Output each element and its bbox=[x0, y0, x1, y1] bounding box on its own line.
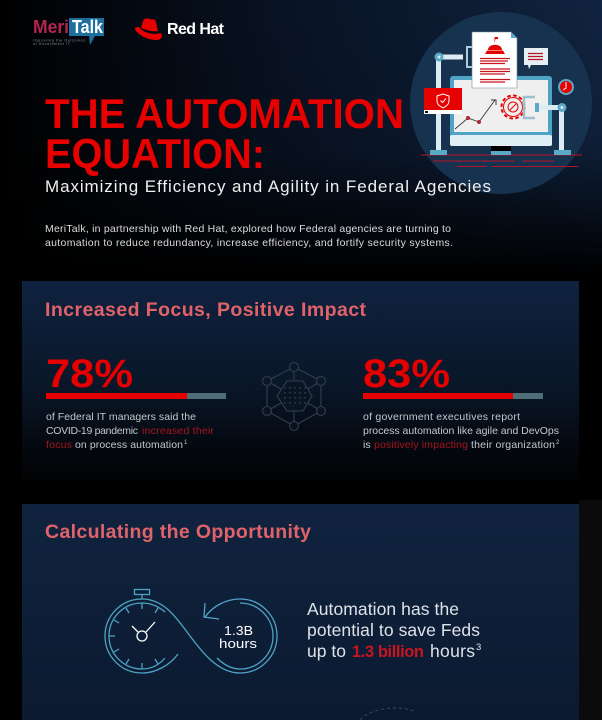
label: 1.3B hours bbox=[219, 623, 258, 651]
intro text: automation to reduce redundancy, increase efficiency, and fortify security systems. bbox=[45, 237, 453, 249]
stat: 83%: of government executives report bbox=[363, 411, 520, 423]
logo: Red Hat bbox=[135, 18, 225, 40]
stat: 83%: is bbox=[363, 439, 371, 451]
callout: 1.3 billion hours bbox=[307, 599, 481, 661]
logo: MeriTalk: Talk bbox=[72, 17, 104, 37]
subtitle: Maximizing Efficiency and Agility in Federal Agencies bbox=[45, 177, 491, 196]
stat: 83%: process automation like agile and DevOps bbox=[363, 425, 559, 437]
icon: network hexagon bbox=[262, 362, 326, 430]
intro text: MeriTalk, in partnership with Red Hat, explored how Federal agencies are turning to bbox=[45, 223, 451, 235]
icon: stopwatch hands bbox=[132, 622, 155, 641]
illustration: speech bubble bbox=[524, 48, 548, 69]
intro text bbox=[45, 223, 453, 249]
logo: Red Hat: Red Hat bbox=[167, 21, 225, 38]
stat: 78%: increased their bbox=[142, 425, 214, 437]
logo: MeriTalk: Improving the Outcomes bbox=[33, 38, 85, 42]
illustration: clock bbox=[559, 80, 573, 94]
illustration: gripper arm bbox=[524, 97, 566, 118]
heading: increased focus: Increased Focus, Positive Impact bbox=[45, 299, 366, 321]
stat: 78%: 78% bbox=[46, 352, 133, 396]
callout: 1.3 billion hours: 1.3 billion bbox=[352, 643, 424, 661]
illustration: security window bbox=[424, 88, 462, 114]
stat: 83%: positively impacting bbox=[374, 439, 468, 451]
stat: 83%: 83% bbox=[363, 352, 450, 396]
logo: MeriTalk: of Government IT bbox=[33, 42, 71, 46]
dashed arc bbox=[360, 708, 414, 720]
callout: 1.3 billion hours: Automation has the bbox=[307, 599, 459, 619]
title: EQUATION: bbox=[45, 130, 265, 177]
header background bbox=[0, 0, 602, 275]
title: THE AUTOMATION bbox=[45, 90, 404, 137]
illustration: robotic arms bbox=[430, 47, 571, 155]
label: 1.3B hours: 1.3B bbox=[224, 623, 253, 638]
stat: 83% bbox=[363, 352, 560, 451]
panel: calculating the opportunity bbox=[22, 504, 579, 720]
illustration: monitor screen bbox=[450, 76, 552, 155]
stat: 78%: focus bbox=[46, 439, 72, 451]
callout: 1.3 billion hours: hours bbox=[430, 641, 475, 661]
illustration: automation monitor bbox=[410, 12, 592, 194]
stat: 83%: 2 bbox=[556, 440, 560, 446]
stat: 83%: their organization bbox=[471, 439, 555, 451]
icon: stopwatch infinity bbox=[105, 590, 277, 673]
stat: 78% bbox=[46, 352, 226, 451]
callout: 1.3 billion hours: 3 bbox=[476, 642, 481, 653]
heading: calculating the opportunity: Calculating the Opportunity bbox=[45, 521, 311, 543]
stat: 78%: 1 bbox=[184, 440, 188, 446]
title bbox=[45, 90, 404, 177]
illustration: document bbox=[472, 32, 517, 88]
logo: MeriTalk: Meri bbox=[33, 17, 69, 37]
label: 1.3B hours: hours bbox=[219, 636, 258, 651]
illustration: floor lines bbox=[421, 155, 582, 166]
logo: MeriTalk bbox=[33, 17, 104, 46]
callout: 1.3 billion hours: up to bbox=[307, 641, 346, 661]
stat: 78%: of Federal IT managers said the bbox=[46, 411, 196, 423]
stat: 78%: on process automation bbox=[75, 439, 183, 451]
stat: 78%: COVID-19 pandemic bbox=[46, 425, 138, 437]
panel: increased focus, positive impact bbox=[22, 281, 579, 486]
illustration: gear bbox=[502, 96, 524, 118]
callout: 1.3 billion hours: potential to save Feds bbox=[307, 620, 480, 640]
